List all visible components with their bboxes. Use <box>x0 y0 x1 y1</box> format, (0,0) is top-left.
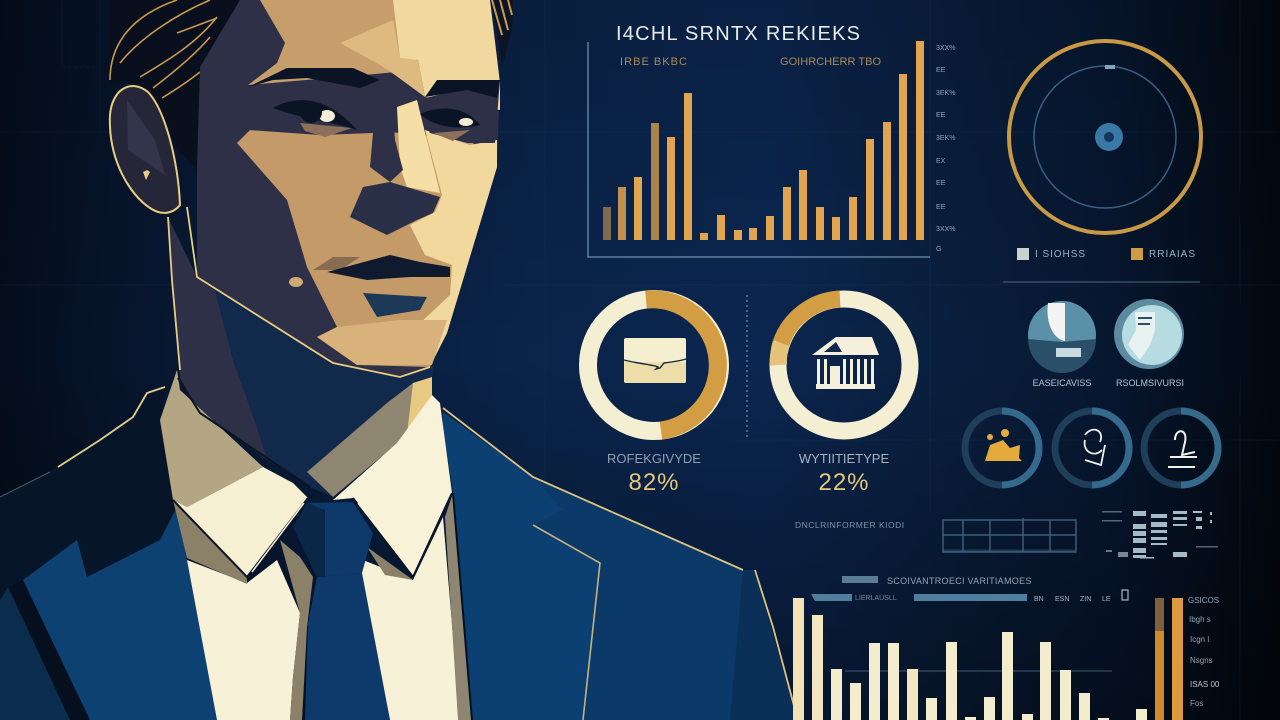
portrait of man in suit <box>0 0 797 720</box>
y axis labels: EE <box>936 112 946 119</box>
side labels: Nsgns <box>1190 656 1213 665</box>
legend: RRIAIAS <box>1149 249 1195 260</box>
y axis labels: 3EK% <box>936 90 955 97</box>
y axis labels: 3EK% <box>936 135 955 142</box>
small data table <box>1102 511 1218 558</box>
ring <box>588 299 720 431</box>
series labels <box>620 56 881 68</box>
header strip: ESN <box>1055 596 1069 603</box>
side labels: ISAS 00 <box>1190 680 1220 689</box>
y axis labels: EE <box>936 67 946 74</box>
y axis labels: 3XX% <box>936 226 955 233</box>
donut: bank 22% <box>778 299 910 496</box>
bar chart: top <box>588 23 955 257</box>
legend <box>1017 248 1195 260</box>
header strip: BN <box>1034 596 1044 603</box>
icon: bank building <box>812 337 879 389</box>
circle badge: left <box>1028 301 1096 388</box>
bars <box>603 41 924 240</box>
mouth <box>289 255 450 317</box>
hair <box>110 0 513 170</box>
ring icon: white figure <box>1055 411 1129 485</box>
label: ROFEKGIVYDE <box>607 451 701 466</box>
ring icon: seated figure <box>1144 411 1218 485</box>
necktie <box>293 502 390 720</box>
header strip <box>811 590 1128 603</box>
legend: I SIOHSS <box>1035 249 1085 260</box>
ring <box>778 299 910 431</box>
jacket right side <box>443 408 797 720</box>
y axis labels <box>936 45 955 253</box>
ring icon: gold figure <box>965 411 1039 485</box>
header strip: ZIN <box>1080 596 1091 603</box>
radial gauge with legend <box>1003 41 1201 282</box>
gold bars <box>1155 598 1183 720</box>
eyebrows <box>248 68 500 98</box>
shirt <box>187 493 472 720</box>
series labels: GOIHRCHERR TBO <box>780 56 881 68</box>
jacket left side <box>0 387 222 720</box>
y axis labels: EE <box>936 180 946 187</box>
y axis labels: G <box>936 246 941 253</box>
side labels: GSICOS <box>1188 596 1219 605</box>
label: RSOLMSIVURSI <box>1116 378 1184 388</box>
circle badge: right <box>1114 299 1184 388</box>
gauge <box>1009 41 1201 233</box>
axes <box>588 42 930 257</box>
icon: briefcase <box>624 338 686 383</box>
chart heading: SCOIVANTROECI VARITIAMOES <box>887 576 1032 586</box>
outline grid table <box>943 518 1076 552</box>
value: 22% <box>818 469 870 496</box>
header strip: LIERLAUSLL <box>855 595 897 602</box>
y axis labels: EE <box>936 204 946 211</box>
side labels <box>1188 596 1220 708</box>
y axis labels: EX <box>936 158 946 165</box>
ear <box>110 86 180 213</box>
caption text: DNCLRINFORMER KIODI <box>795 520 905 530</box>
small ring icons <box>965 411 1218 485</box>
shirt collar <box>160 370 452 584</box>
dotted divider <box>746 295 748 437</box>
donut: briefcase 82% <box>588 299 720 496</box>
neck <box>168 217 434 497</box>
bar chart: bottom <box>793 576 1220 720</box>
eyes <box>273 100 480 141</box>
side labels: Icgn l <box>1190 635 1209 644</box>
cream bars <box>793 598 1147 720</box>
side labels: Fos <box>1190 699 1203 708</box>
series labels: IRBE BKBC <box>620 56 687 68</box>
value: 82% <box>628 469 680 496</box>
chart title: I4CHL SRNTX REKIEKS <box>616 23 860 45</box>
side labels: Ibgh s <box>1189 615 1211 624</box>
label: WYTIITIETYPE <box>799 451 889 466</box>
y axis labels: 3XX% <box>936 45 955 52</box>
face <box>168 0 500 377</box>
header strip: LE <box>1102 596 1111 603</box>
label: EASEICAVISS <box>1033 378 1091 388</box>
guide lines <box>845 670 1112 672</box>
